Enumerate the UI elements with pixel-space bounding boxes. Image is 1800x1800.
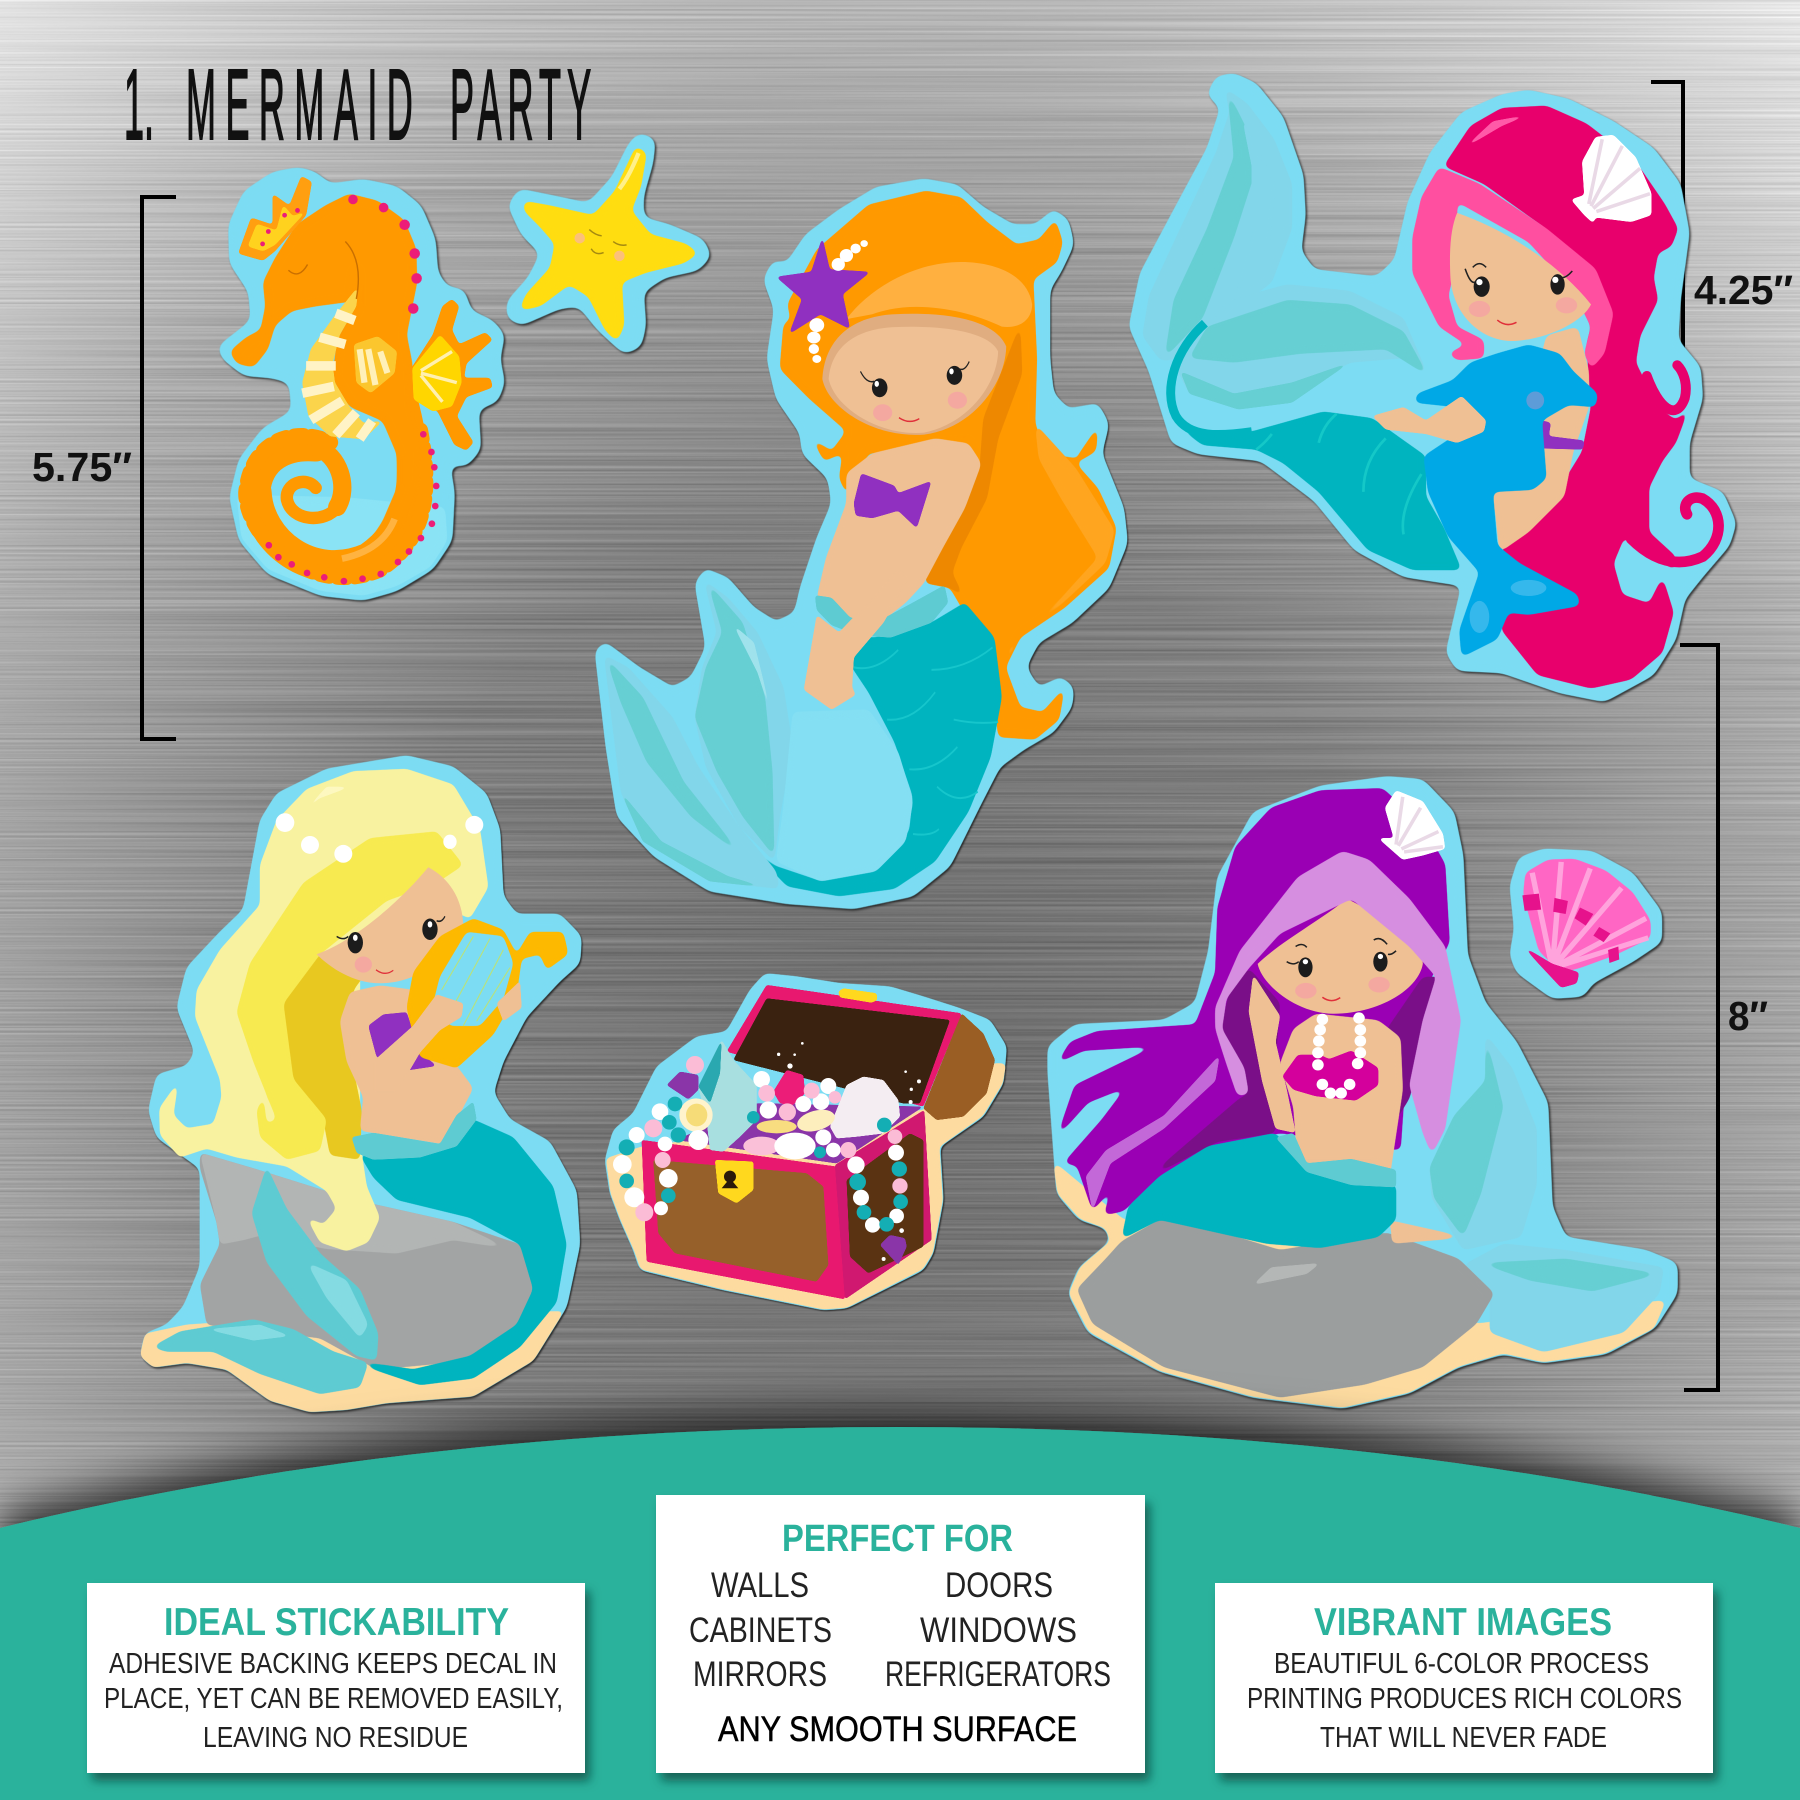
title [124, 49, 591, 160]
seahorse side fin [354, 336, 397, 393]
seashell fan [1523, 859, 1650, 973]
purple mermaid face [1258, 899, 1423, 1014]
chest side panel [847, 1133, 923, 1273]
surface list [689, 1566, 1111, 1694]
seahorse belly stripes [302, 287, 383, 439]
pink mermaid face [1450, 213, 1591, 341]
dimension: 4.25 inch bracket: 4.25″ [1694, 267, 1793, 313]
orange mermaid starfish hair clip [776, 237, 870, 334]
orange mermaid hair shade [924, 324, 1022, 598]
seashell backing [1510, 849, 1662, 999]
orange mermaid torso [817, 439, 981, 638]
sticker: seahorse [218, 167, 505, 600]
body text: adhesive backing: ADHESIVE BACKING KEEPS DECAL IN [109, 1648, 557, 1680]
purple mermaid hair shadow [1126, 968, 1441, 1211]
blonde mermaid waist band [352, 1102, 477, 1160]
pearl necklaces: pink [635, 1056, 908, 1221]
chest purple lining [677, 1103, 923, 1163]
pink mermaid hair highlight [1464, 115, 1529, 148]
body text: beautiful printing: PRINTING PRODUCES RICH COLORS [1247, 1683, 1682, 1715]
purple mermaid rock [1077, 1220, 1494, 1398]
sticker: starfish [507, 133, 711, 354]
seahorse tail [246, 397, 425, 577]
surface list: DOORS [945, 1566, 1053, 1605]
panel: perfect for [656, 1495, 1145, 1773]
surface list: REFRIGERATORS [885, 1655, 1111, 1694]
purple mermaid torso and arms [1249, 975, 1465, 1244]
starfish body [519, 146, 698, 342]
panel: ideal stickability [87, 1583, 585, 1773]
blonde mermaid face [317, 867, 463, 983]
orange mermaid facial features [860, 361, 969, 421]
orange mermaid lower panel [776, 710, 913, 881]
sticker: blonde mermaid with harp [140, 756, 582, 1412]
blonde mermaid backing [140, 756, 582, 1412]
treasure shells and gems [667, 1040, 907, 1265]
orange mermaid face [822, 314, 1006, 435]
seahorse dorsal fin [411, 299, 493, 451]
chest sand [606, 1063, 1006, 1309]
orange mermaid hair bangs [846, 262, 1032, 327]
blonde mermaid sand [140, 1307, 567, 1412]
orange mermaid hair back [780, 191, 1116, 739]
pink mermaid facial features [1465, 264, 1577, 325]
blonde mermaid rock [200, 1153, 533, 1369]
title: PARTY [450, 49, 591, 160]
purple mermaid backing [1048, 776, 1677, 1408]
heading: ideal stickability: IDEAL STICKABILITY [164, 1601, 509, 1644]
pink mermaid upper fin [1142, 88, 1292, 360]
starfish face [574, 230, 627, 261]
seahorse pink dots [265, 195, 440, 584]
pearl necklaces: white [613, 1071, 904, 1233]
surface list: MIRRORS [693, 1655, 827, 1694]
orange mermaid bra [854, 473, 932, 528]
sticker: orange-haired mermaid [595, 179, 1128, 909]
orange mermaid tail fins [604, 580, 793, 889]
blonde mermaid hair back [159, 769, 488, 1251]
starfish highlight [619, 153, 639, 189]
pink mermaid backing [1129, 73, 1736, 702]
chest lock [715, 1160, 753, 1203]
pink mermaid shell [1571, 135, 1651, 223]
seashell rays [1532, 862, 1648, 968]
golden harp [407, 919, 568, 1068]
seahorse eye and neck line [288, 242, 358, 299]
title: 1. [124, 49, 154, 160]
sticker: pink seashell [1510, 849, 1662, 999]
panel: vibrant images [1215, 1583, 1713, 1773]
orange mermaid tail scales [854, 647, 998, 835]
surface list: WALLS [711, 1566, 809, 1605]
dolphin [1415, 345, 1598, 657]
seahorse tail highlight [342, 519, 395, 559]
chest side [835, 1110, 932, 1299]
blonde mermaid bra [368, 1012, 437, 1070]
purple mermaid front hair [1215, 851, 1461, 1155]
orange mermaid pearls [807, 240, 868, 363]
body text: adhesive backing [104, 1648, 563, 1754]
pink mermaid arm [1372, 396, 1486, 443]
title: MERMAID [186, 49, 413, 160]
pink mermaid body [1484, 327, 1589, 552]
sticker: purple-haired mermaid on rock [1048, 776, 1677, 1408]
sticker: treasure chest [605, 973, 1007, 1310]
pink mermaid lower fin [1176, 284, 1428, 409]
pink mermaid tail [1171, 323, 1462, 570]
purple mermaid bra [1282, 1051, 1378, 1100]
seahorse body [230, 194, 423, 550]
dimension: 5.75 inch bracket [32, 197, 176, 739]
blonde mermaid horizontal fin [152, 1319, 368, 1394]
orange mermaid waist band [815, 585, 948, 638]
body text: beautiful printing: BEAUTIFUL 6-COLOR PROCESS [1274, 1648, 1649, 1680]
dimension: 8 inch bracket [1680, 645, 1768, 1390]
orange mermaid arms [804, 568, 909, 710]
blonde mermaid vertical fin [252, 1166, 378, 1360]
body text: beautiful printing [1247, 1648, 1682, 1754]
seashell magenta bands [1522, 894, 1619, 963]
blonde mermaid body [340, 986, 473, 1144]
seahorse backing [218, 167, 505, 600]
blonde mermaid tail [320, 1119, 567, 1385]
surface list: CABINETS [689, 1611, 832, 1650]
teal arch footer [0, 1427, 1800, 1800]
pearl necklaces: teal [619, 1097, 908, 1232]
sticker: pink-haired mermaid with dolphin [1129, 73, 1736, 702]
blonde mermaid pearls [276, 813, 483, 863]
heading: perfect for: PERFECT FOR [782, 1518, 1013, 1560]
seahorse crown [238, 176, 312, 261]
dimension: 5.75 inch bracket: 5.75″ [32, 444, 132, 490]
blonde mermaid hair highlight [302, 787, 350, 814]
blonde mermaid hands [373, 994, 463, 1093]
dimension: 4.25 inch bracket [1651, 82, 1793, 350]
purple mermaid shell [1378, 790, 1445, 860]
purple mermaid tail [1122, 1133, 1396, 1248]
surface list: WINDOWS [920, 1611, 1077, 1650]
body text: beautiful printing: THAT WILL NEVER FADE [1320, 1722, 1607, 1754]
purple mermaid hair back [1057, 788, 1450, 1215]
starfish backing [507, 133, 711, 354]
sparkles [777, 1042, 921, 1261]
pink mermaid bikini strap [1531, 421, 1584, 450]
chest front panel [653, 1160, 828, 1282]
seashell base [1523, 946, 1579, 988]
purple mermaid pearl necklace [1312, 1012, 1366, 1099]
chest front [642, 1140, 845, 1299]
orange mermaid tail [739, 603, 1002, 896]
purple mermaid waist band [1276, 1133, 1396, 1187]
blonde mermaid hair mid tone [262, 954, 370, 1160]
body text: adhesive backing: LEAVING NO RESIDUE [203, 1722, 468, 1754]
orange mermaid backing [595, 179, 1128, 909]
blonde mermaid facial features [337, 916, 445, 973]
dimension: 8 inch bracket: 8″ [1728, 993, 1768, 1039]
pink mermaid hair [1444, 106, 1719, 688]
pink mermaid front hair [1412, 167, 1613, 369]
purple mermaid sand [1053, 1161, 1666, 1408]
chest backing [605, 973, 1007, 1310]
purple mermaid facial features [1287, 939, 1396, 1001]
heading: vibrant images: VIBRANT IMAGES [1314, 1601, 1612, 1644]
purple mermaid light strand [1086, 1055, 1220, 1211]
purple mermaid tail fins [1430, 1033, 1664, 1352]
body text: adhesive backing: PLACE, YET CAN BE REMOVED EASILY, [104, 1683, 563, 1715]
any smooth surface line: ANY SMOOTH SURFACE [718, 1710, 1077, 1749]
chest lid [727, 985, 995, 1120]
